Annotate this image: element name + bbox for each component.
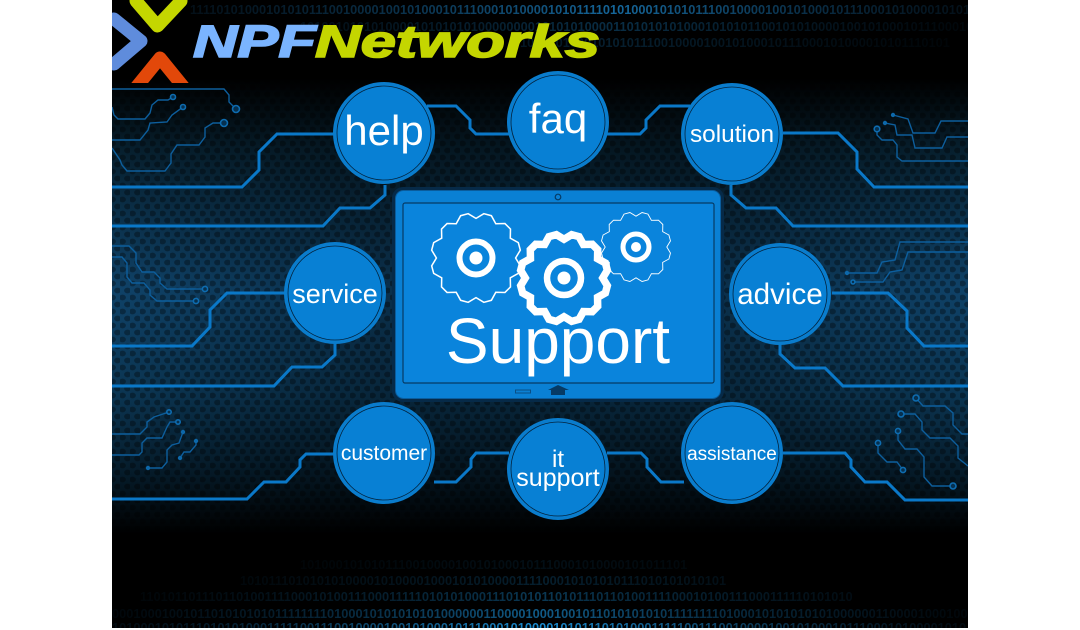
gear right (602, 213, 670, 281)
thin circuit traces lower left (112, 410, 198, 470)
node: solution (682, 84, 782, 184)
node: help (334, 84, 434, 182)
node: solution: solution (690, 121, 774, 148)
infographic canvas (112, 0, 968, 628)
logo wordmark: Networks (315, 16, 600, 67)
binary code rows top (112, 5, 968, 628)
binary code rows top: 101011101010101000010100001000101010000111100010101010111010101010101 (240, 573, 726, 588)
binary code rows top: 1010001010101110010000100101000101110001010000101011101 (300, 557, 687, 572)
node: service: service (292, 279, 378, 309)
tablet home icon (548, 385, 569, 395)
tablet back button (516, 390, 530, 393)
node: customer: customer (341, 442, 427, 465)
thin circuit traces middle left (112, 246, 208, 304)
binary code rows top: 1101011011101101001111000101001110001111101010100011101010110101110110100111100010100111000111110101010 (140, 589, 853, 604)
binary code rows top: 1010101000101010111001000010010100010111000101000010101110101 (520, 35, 950, 50)
node: assistance: assistance (687, 444, 777, 465)
thin circuit traces middle right (845, 242, 968, 284)
binary code rows top: 00010001001011010101010111111110100010101010101000000110000100010010110101010101111111101000101010101010000001100001000100 (112, 606, 968, 621)
node: assistance (682, 404, 782, 502)
tablet with support graphic (392, 187, 724, 402)
binary code rows top: 1111010100010101011100100001001010001011100010100001010111101010001010101110010000100101000101110001010000101011110101000101010111 (190, 2, 1080, 17)
node: advice (730, 244, 830, 344)
node: help: help (344, 107, 424, 154)
gear left (432, 214, 520, 302)
logo mark (114, 1, 186, 90)
thin circuit traces lower right (875, 395, 968, 489)
thin circuit traces top right (874, 113, 968, 161)
node: it support: support (516, 464, 600, 492)
support heading: Support (446, 305, 670, 377)
background panel (112, 0, 968, 628)
gear centre (521, 235, 607, 321)
node: faq (508, 72, 608, 172)
node: advice: advice (737, 278, 823, 311)
logo wordmark: NPF (193, 16, 318, 67)
binary code rows top: 10100101010100001010101010000000010101010000110101010100010101011001010100001001010001011100010100001010101 (300, 19, 1059, 34)
main circuit connectors (112, 106, 968, 500)
node: customer (334, 404, 434, 502)
node: it support (508, 420, 608, 518)
logo wordmark (192, 23, 600, 58)
node: service (286, 244, 384, 342)
thin circuit traces top left (112, 89, 240, 171)
tablet camera (555, 194, 561, 200)
node: it support: it (552, 446, 564, 473)
node: faq: faq (529, 95, 587, 142)
